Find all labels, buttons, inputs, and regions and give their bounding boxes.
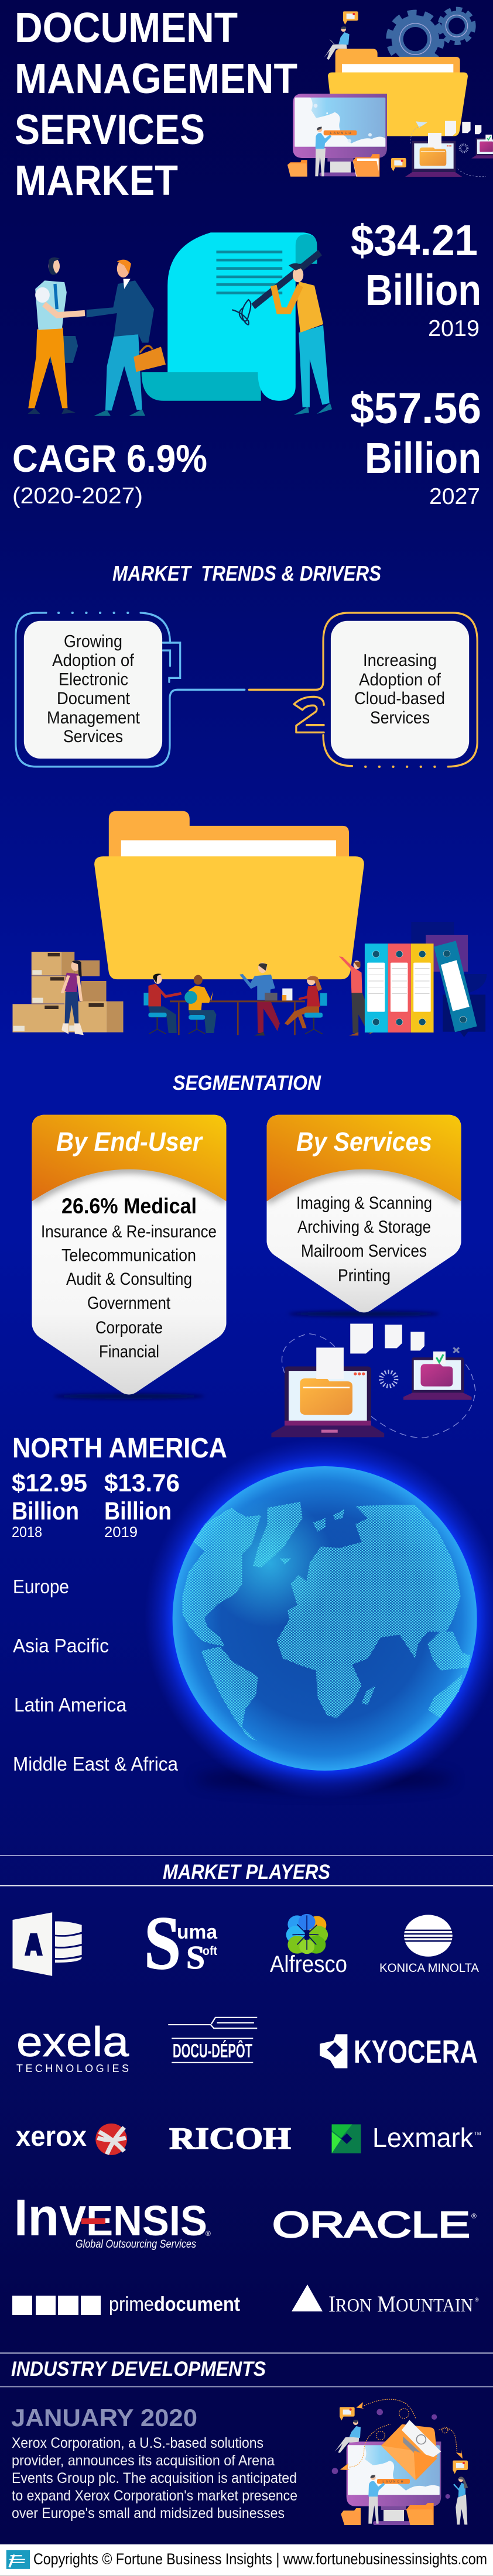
list: service segments: Printing	[338, 1266, 391, 1285]
icon: scroll document	[142, 232, 317, 401]
logo: exela: exela	[16, 2019, 129, 2066]
illustration: email and monitor	[332, 2399, 468, 2525]
logo: docu-depot: DOCU-DÉPÔT	[173, 2039, 252, 2062]
list: end-user segments	[41, 1194, 217, 1361]
panel: by services	[266, 1115, 461, 1318]
card shape	[32, 1115, 227, 1398]
logo: invensis: Global Outsourcing Services	[76, 2238, 196, 2251]
illustration: big folder with team, boxes, binders	[12, 811, 487, 1037]
logo: suma soft: oft	[203, 1944, 217, 1958]
date: JANUARY 2020	[11, 2404, 197, 2431]
CAGR	[12, 437, 207, 509]
list: other regions: Latin America	[14, 1694, 127, 1716]
icon: seated man yellow shirt	[184, 975, 216, 1034]
icon: man shaking hands	[28, 258, 85, 414]
icon: small folders	[287, 154, 379, 177]
logo: oracle: ORACLE	[272, 2205, 470, 2245]
card heading: By Services	[296, 1127, 432, 1157]
CAGR: (2020-2027)	[12, 483, 143, 509]
driver 2 text	[354, 651, 445, 728]
icon: spinner	[460, 145, 467, 152]
driver 1 text: Services	[63, 727, 123, 746]
orange outline	[249, 613, 477, 767]
logo: docu-depot	[168, 2018, 257, 2063]
icon: sitting person with laptop	[324, 26, 350, 60]
icon: small pink laptop	[471, 135, 493, 159]
card shadow	[53, 1394, 204, 1399]
title: MANAGEMENT	[15, 56, 297, 102]
regional stats: north america: Billion	[12, 1497, 79, 1525]
icon: big laptop	[271, 1347, 384, 1437]
logo: alfresco	[270, 1914, 347, 1977]
description: over Europe's small and midsized businesses	[12, 2505, 285, 2522]
islands	[280, 1509, 376, 1705]
regional stats: north america	[12, 1433, 227, 1541]
driver 2 text: Increasing	[363, 651, 437, 670]
icon: chat bubble lower	[391, 158, 406, 171]
driver 1 text: Growing	[64, 632, 122, 651]
description: Xerox Corporation, a U.S.-based solutions	[12, 2435, 263, 2451]
eurasia and africa	[277, 1505, 461, 1719]
card shadow	[289, 1311, 440, 1316]
regional stats: north america: $13.76	[104, 1469, 180, 1497]
panel: driver 1	[16, 613, 245, 767]
icon: woman with boxes	[61, 961, 84, 1035]
regional stats: north america: 2019	[104, 1524, 138, 1541]
heading: market trends and drivers: MARKET TRENDS & DRIVERS	[112, 561, 381, 585]
heading: industry developments: INDUSTRY DEVELOPMENTS	[11, 2358, 266, 2381]
icon: chat bubble top	[343, 11, 358, 25]
logo: invensis: ®	[206, 2229, 211, 2238]
logo: lexmark: Lexmark	[372, 2122, 474, 2153]
panel: by end-user	[32, 1115, 227, 1399]
icon: binders	[365, 941, 477, 1033]
list: service segments	[296, 1193, 432, 1285]
icon: sitting person	[335, 2420, 361, 2453]
illustration: laptops exchanging documents	[271, 1324, 475, 1438]
list: service segments: Archiving & Storage	[297, 1217, 431, 1237]
title: SERVICES	[15, 107, 205, 153]
icon: arrow heads	[340, 2402, 463, 2470]
heading: market players: MARKET PLAYERS	[163, 1861, 330, 1884]
driver 2 text: Cloud-based	[354, 689, 445, 708]
logo: invensis: InVENSIS	[14, 2187, 207, 2247]
icon: man with briefcase	[87, 260, 166, 416]
title: MARKET	[15, 157, 178, 204]
logo: suma soft: S	[186, 1940, 205, 1976]
title	[15, 5, 297, 204]
driver 2 text: Adoption of	[359, 670, 441, 690]
regional stats: north america: NORTH AMERICA	[12, 1433, 227, 1464]
icon: flying papers	[416, 121, 481, 136]
icon: pen	[253, 253, 320, 306]
panel: january 2020 development	[11, 2404, 297, 2522]
logo: iron mountain	[292, 2285, 479, 2317]
driver 1 text	[47, 632, 141, 746]
market value 2019	[351, 216, 481, 341]
icon: open envelope	[381, 2420, 441, 2480]
icon: big folder	[94, 811, 364, 979]
icon: standing man blue shirt	[239, 962, 292, 1035]
list: end-user segments: Financial	[99, 1342, 159, 1361]
heading: segmentation: SEGMENTATION	[173, 1072, 321, 1095]
driver 2 text: Services	[370, 708, 430, 728]
dashed arc	[458, 169, 486, 177]
market value 2027: $57.56	[350, 384, 481, 433]
driver 1 text: Management	[47, 708, 141, 728]
icon: gears	[390, 9, 473, 64]
market value 2019: 2019	[428, 316, 480, 341]
card shape	[266, 1115, 461, 1318]
icon: small laptop	[403, 1347, 472, 1400]
list: other regions: Asia Pacific	[13, 1635, 109, 1656]
driver 1 text: Electronic	[59, 670, 128, 690]
logo: suma soft: uma	[177, 1921, 218, 1943]
icon: fortune business insights logo	[6, 2550, 30, 2569]
regional stats: north america: 2018	[12, 1524, 42, 1541]
logo: xerox	[16, 2121, 127, 2155]
list: end-user segments: Government	[87, 1294, 171, 1313]
icon: monitor	[293, 94, 387, 176]
logo: lexmark	[332, 2122, 481, 2153]
list: end-user segments: Audit & Consulting	[66, 1270, 192, 1289]
logo: exela: TECHNOLOGIES	[16, 2063, 129, 2074]
greenland	[253, 1502, 303, 1567]
driver 1 text: Adoption of	[52, 651, 135, 670]
icon: seated man red shirt	[143, 973, 182, 1034]
driver 1 text: Document	[57, 689, 131, 708]
regional stats: north america: $12.95	[12, 1469, 87, 1497]
illustration: folder, gears, monitor and laptops	[287, 9, 493, 177]
south america	[201, 1647, 258, 1741]
card heading: By End-User	[56, 1127, 203, 1157]
logo: suma soft	[144, 1901, 218, 1985]
logo: alfresco: Alfresco	[270, 1951, 347, 1977]
illustration: people signing a document	[28, 232, 332, 416]
icon: laptop with orange folder	[405, 133, 462, 177]
icon: person at monitor	[315, 127, 331, 176]
list: service segments: Imaging & Scanning	[296, 1193, 432, 1213]
list: service segments: Mailroom Services	[301, 1241, 427, 1261]
regional stats: north america: Billion	[104, 1497, 172, 1525]
description: provider, announces its acquisition of Arena	[12, 2452, 275, 2469]
logo: prime document: primedocument	[109, 2293, 240, 2316]
icon: large folder	[328, 49, 468, 136]
logo: konica minolta: KONICA MINOLTA	[379, 1961, 479, 1975]
title: DOCUMENT	[15, 5, 238, 52]
icon: coins	[332, 2409, 450, 2499]
list: end-user segments: Corporate	[95, 1318, 163, 1337]
north america	[182, 1508, 261, 1647]
logo: iron mountain: IRON MOUNTAIN	[328, 2292, 473, 2317]
icon: globe	[145, 1438, 493, 1799]
logo: suma soft: S	[144, 1901, 181, 1985]
logo: oracle: ®	[471, 2212, 477, 2220]
market value 2019: $34.21	[351, 216, 478, 265]
south east asia	[427, 1632, 470, 1671]
icon: dashed arrows	[350, 2399, 457, 2467]
market value 2027	[350, 384, 481, 509]
logo: xerox: xerox	[16, 2121, 87, 2152]
icon: seated woman	[285, 976, 327, 1034]
icon: woman signing	[273, 263, 332, 415]
description	[12, 2435, 297, 2522]
icon: small folders	[341, 2503, 434, 2525]
list: end-user segments: Telecommunication	[61, 1246, 196, 1265]
logo: ricoh: RICOH	[169, 2122, 291, 2156]
market value 2027: 2027	[429, 484, 480, 509]
list: other regions: Europe	[13, 1576, 69, 1597]
icon: monitor: LAUNCH	[382, 2480, 405, 2484]
australia	[428, 1675, 462, 1719]
icon: monitor	[347, 2441, 441, 2525]
description: Events Group plc. The acquisition is anticipated	[12, 2470, 297, 2486]
blue outline	[16, 613, 245, 767]
logo: prime document	[12, 2293, 240, 2316]
panel: driver 2	[249, 613, 477, 767]
icon: monitor: LAUNCH	[330, 132, 352, 135]
dashed circles	[282, 1333, 475, 1438]
list: end-user segments: Insurance & Re-insurance	[41, 1222, 217, 1241]
icon: standing man	[368, 2475, 385, 2524]
list: other regions	[13, 1576, 179, 1775]
logo: access	[12, 1912, 82, 1976]
footer	[0, 2544, 493, 2576]
logo: konica minolta	[379, 1915, 479, 1975]
icon: standing woman	[453, 2476, 468, 2524]
icon: papers	[350, 1324, 424, 1354]
list: end-user segments: 26.6% Medical	[61, 1194, 197, 1218]
icon: spinner	[381, 1372, 396, 1386]
CAGR: CAGR 6.9%	[12, 437, 207, 480]
description: to expand Xerox Corporation's market presence	[12, 2488, 297, 2504]
icon: chat bubbles	[340, 2407, 468, 2474]
icon: background squares	[411, 922, 487, 1037]
logo: lexmark: TM	[474, 2131, 481, 2136]
logo: iron mountain: ®	[475, 2297, 479, 2303]
list: other regions: Middle East & Africa	[13, 1753, 179, 1775]
icon: cardboard boxes	[12, 952, 124, 1033]
icon: meeting table	[170, 1000, 305, 1035]
icon: pointing man	[339, 956, 376, 1035]
